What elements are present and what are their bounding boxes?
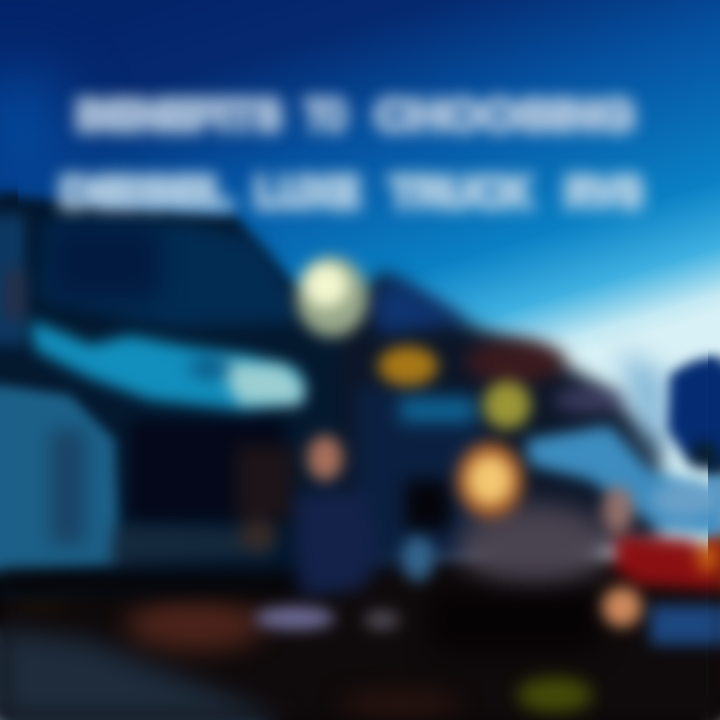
person standing in front of the trucks [255, 435, 400, 630]
right edge underlay [708, 362, 720, 720]
title line 2: RVS [565, 168, 643, 217]
title line 2: TRUCK [390, 168, 532, 217]
title line 2: LUXE [255, 168, 360, 217]
left edge pillar [0, 215, 24, 345]
hood highlight [30, 320, 305, 410]
ground [0, 560, 720, 720]
title line 1: BENEFITS [76, 91, 282, 140]
title line 2: DIESEL [60, 168, 232, 217]
windshield [40, 218, 295, 328]
far right blue vehicle [668, 358, 720, 470]
distant hills and buildings [320, 272, 665, 560]
third vehicle on the right [525, 425, 720, 645]
title line 2 [60, 168, 643, 217]
grille [130, 420, 285, 520]
street lights and amber windows [378, 346, 531, 518]
front side panel [0, 385, 120, 570]
bottom edge underlay [0, 695, 720, 720]
bumper [110, 525, 275, 565]
title [60, 91, 643, 217]
icon: truck cab, main RV on the left [0, 195, 340, 600]
title line 1: TO [305, 91, 347, 140]
title line 1: CHOOSING [375, 91, 635, 140]
left edge underlay [0, 195, 18, 720]
blurred scene [0, 195, 720, 720]
title line 1 [76, 91, 635, 140]
icon: truck headlight glow [296, 257, 368, 337]
truck body [0, 195, 340, 600]
second vehicle centre right [355, 385, 613, 650]
